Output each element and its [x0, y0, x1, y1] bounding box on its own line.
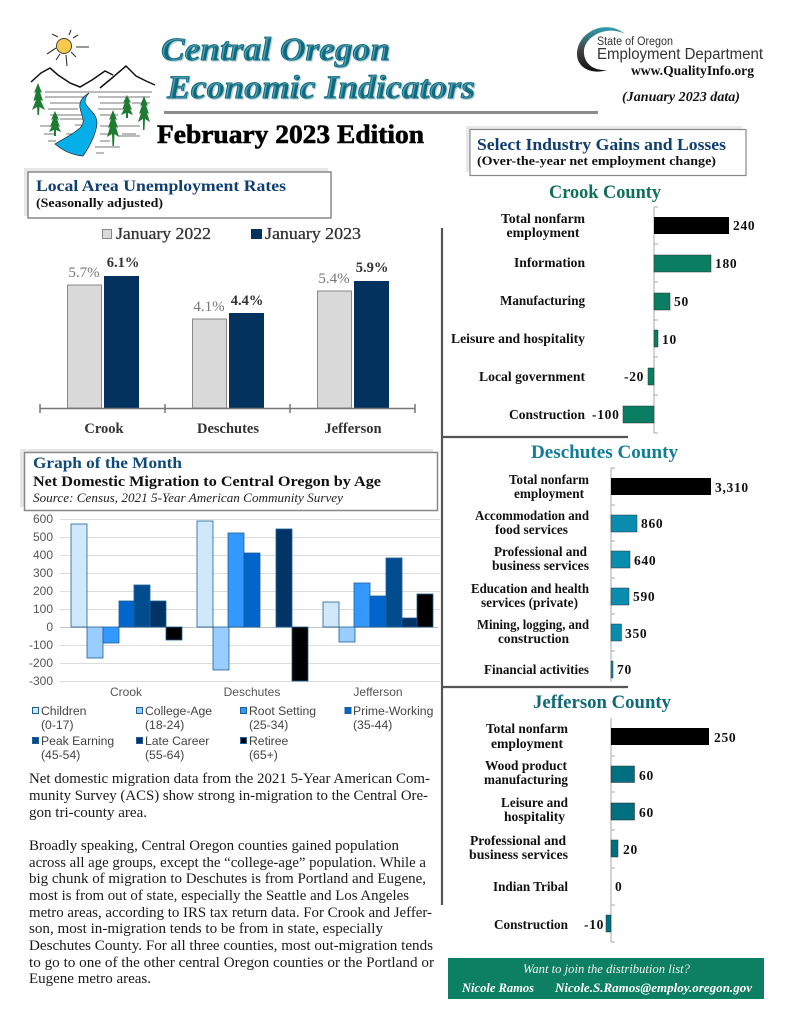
bar chart: Construction	[509, 407, 585, 422]
bar chart: 860	[641, 516, 663, 531]
panel: graph of the month heading: Net Domestic Migration to Central Oregon by Age	[33, 474, 381, 490]
Jefferson bars	[323, 558, 433, 642]
bar chart: Leisure and hospitality	[451, 331, 585, 346]
bar chart: Indian Tribal	[493, 879, 568, 894]
category labels: Deschutes	[224, 685, 280, 699]
bar chart: Manufacturing	[500, 293, 585, 308]
y axis labels: 300	[33, 566, 53, 580]
bar chart	[469, 718, 736, 942]
header rule	[164, 111, 598, 114]
category labels: Crook	[110, 685, 143, 699]
panel: distribution list callout: Nicole Ramos	[461, 980, 534, 995]
bar chart: food services	[495, 522, 568, 537]
icon: plains lines	[40, 92, 152, 153]
panel: distribution list callout: Nicole.S.Ramos@employ.oregon.gov	[554, 980, 752, 995]
data labels: 5.7%	[68, 265, 100, 281]
bar chart: 240	[733, 218, 755, 233]
bar chart: Total nonfarm	[509, 472, 590, 487]
bar chart: business services	[469, 847, 568, 862]
panel: unemployment heading: (Seasonally adjusted)	[36, 196, 163, 210]
text block: migration narrative: Deschutes County. For all three counties, most out-migration tends	[29, 938, 433, 954]
y axis labels: 600	[33, 512, 53, 526]
bar chart: Leisure and	[501, 795, 568, 810]
legend: Children	[41, 704, 86, 718]
legend: (65+)	[249, 748, 278, 762]
y axis labels	[29, 512, 53, 688]
y axis labels: 500	[33, 530, 53, 544]
text block: migration narrative: munity Survey (ACS) show strong in-migration to the Central Ore-	[29, 788, 428, 804]
bar chart: 0	[615, 879, 622, 894]
legend: Peak Earning	[41, 734, 114, 748]
bar chart: employment	[514, 486, 584, 501]
bar chart: -10	[584, 917, 604, 932]
data labels: 4.4%	[231, 293, 263, 309]
panel: Crook County	[451, 183, 755, 433]
legend: (18-24)	[145, 718, 184, 732]
panel: industry gains and losses heading: Select Industry Gains and Losses	[477, 135, 726, 154]
category labels: Jefferson	[353, 685, 403, 699]
bar chart: Mining, logging, and	[477, 617, 589, 632]
y axis labels: 100	[33, 602, 53, 616]
Employment Department logo: Employment Department	[597, 46, 764, 63]
text block: migration narrative: to go to one of the other central Oregon counties or the Portland or	[29, 955, 434, 971]
text block: migration narrative: Broadly speaking, Central Oregon counties gained population	[29, 838, 399, 854]
bar chart: Education and health	[471, 581, 589, 596]
text block: migration narrative: Eugene metro areas.	[29, 971, 151, 987]
category labels	[110, 685, 403, 699]
panel: graph of the month heading: Graph of the Month	[33, 455, 182, 472]
icon: Central Oregon landscape logo	[31, 30, 155, 156]
panel: unemployment heading: Local Area Unemployment Rates	[36, 178, 286, 195]
data date note: (January 2023 data)	[622, 89, 740, 104]
Crook bars	[71, 524, 182, 658]
bar chart: 3,310	[715, 480, 749, 495]
legend	[102, 224, 361, 243]
bar chart: Financial activities	[484, 662, 589, 677]
panel: Deschutes County	[471, 443, 749, 682]
icon: river	[55, 93, 97, 156]
data labels: 6.1%	[107, 255, 139, 271]
bar chart: manufacturing	[484, 772, 568, 787]
bar chart: net domestic migration by age	[29, 512, 440, 762]
bar chart: -20	[624, 369, 644, 384]
bar chart: 60	[639, 805, 654, 820]
bar chart	[471, 468, 749, 682]
bar chart: employment	[506, 225, 580, 240]
Employment Department logo: State of Oregon	[597, 36, 673, 48]
data labels	[68, 255, 388, 315]
title: Central Oregon	[161, 32, 390, 68]
legend: College-Age	[145, 704, 212, 718]
bar chart: Wood product	[485, 758, 567, 773]
y axis labels: 400	[33, 548, 53, 562]
panel: industry gains and losses heading: (Over-the-year net employment change)	[477, 153, 716, 168]
bar chart: unemployment rates	[40, 224, 415, 437]
bar chart: Construction	[494, 917, 568, 932]
bar chart: services (private)	[481, 595, 578, 610]
bar chart: 640	[634, 553, 656, 568]
text block: migration narrative: most is from out of state, especially the Seattle and Los Angeles	[29, 888, 409, 904]
text block: migration narrative: son, most in-migration tends to be from in state, especially	[29, 921, 383, 937]
legend: January 2023	[265, 224, 361, 243]
bar chart: 350	[625, 626, 647, 641]
panel: graph of the month heading	[20, 449, 438, 510]
panel: distribution list callout	[448, 958, 764, 999]
bar chart: Accommodation and	[475, 508, 589, 523]
legend: Retiree	[249, 734, 289, 748]
legend: Root Setting	[249, 704, 316, 718]
bar chart: Local government	[479, 369, 586, 384]
edition heading: February 2023 Edition	[157, 120, 425, 149]
bar chart: 60	[639, 768, 654, 783]
y axis labels: -300	[29, 674, 53, 688]
data labels: 5.9%	[356, 260, 388, 276]
icon: sun	[47, 30, 89, 66]
panel: industry gains and losses heading	[466, 126, 746, 176]
bar chart: Professional and	[494, 544, 587, 559]
legend: (35-44)	[353, 718, 392, 732]
data labels: 5.4%	[318, 271, 350, 287]
icon: pine trees	[32, 83, 150, 146]
panel: distribution list callout: Want to join the distribution list?	[523, 961, 690, 976]
bar chart: 10	[662, 332, 677, 347]
bar chart: construction	[498, 631, 569, 646]
bar chart: Professional and	[470, 833, 566, 848]
legend: Prime-Working	[353, 704, 433, 718]
bar chart: -100	[592, 407, 620, 422]
bar chart: 180	[715, 256, 737, 271]
text block: migration narrative	[29, 771, 434, 987]
title	[161, 32, 475, 106]
category labels: Jefferson	[324, 421, 382, 437]
title: Economic Indicators	[166, 70, 475, 106]
text block: migration narrative: across all age groups, except the “college-age” population. While a	[29, 855, 426, 871]
panel: graph of the month heading: Source: Census, 2021 5-Year American Community Survey	[33, 491, 343, 505]
bar chart: hospitality	[504, 809, 565, 824]
legend: (45-54)	[41, 748, 80, 762]
bar chart: 50	[674, 294, 689, 309]
panel: unemployment heading	[24, 168, 331, 218]
category labels: Deschutes	[197, 421, 259, 437]
heading: Jefferson County	[533, 693, 672, 713]
text block: migration narrative: big chunk of migration to Deschutes is from Portland and Eugene,	[29, 871, 426, 887]
data labels: 4.1%	[193, 299, 225, 315]
y axis labels: -100	[29, 638, 53, 652]
legend: Late Career	[145, 734, 209, 748]
legend	[32, 704, 433, 762]
bar chart: 250	[714, 730, 736, 745]
bar chart: employment	[491, 736, 563, 751]
Employment Department logo: www.QualityInfo.org	[631, 64, 754, 79]
bar chart: Information	[514, 255, 585, 270]
bar chart: business services	[492, 558, 589, 573]
legend: January 2022	[116, 224, 211, 243]
bar chart	[451, 207, 755, 433]
category labels	[84, 421, 382, 437]
bar chart: Total nonfarm	[501, 211, 586, 226]
bars	[68, 276, 389, 408]
y axis labels: 0	[46, 620, 53, 634]
legend: (55-64)	[145, 748, 184, 762]
heading: Deschutes County	[531, 443, 679, 463]
text block: migration narrative: gon tri-county area.	[29, 805, 147, 821]
bar chart: 70	[617, 662, 632, 677]
Employment Department logo	[577, 27, 764, 79]
Deschutes bars	[197, 521, 308, 681]
axis	[40, 404, 415, 413]
heading: Crook County	[549, 183, 662, 203]
icon: mountains	[31, 66, 155, 88]
panel: Jefferson County	[469, 693, 736, 942]
category labels: Crook	[84, 421, 125, 437]
grid lines and axis	[60, 520, 440, 682]
bar chart: Total nonfarm	[486, 721, 569, 736]
legend: (0-17)	[41, 718, 74, 732]
y axis labels: -200	[29, 656, 53, 670]
y axis labels: 200	[33, 584, 53, 598]
text block: migration narrative: metro areas, according to IRS tax return data. For Crook and Jeffer-	[29, 905, 432, 921]
legend: (25-34)	[249, 718, 288, 732]
bar chart: 590	[633, 589, 655, 604]
text block: migration narrative: Net domestic migration data from the 2021 5-Year American Com-	[29, 771, 430, 787]
bar chart: 20	[623, 842, 638, 857]
